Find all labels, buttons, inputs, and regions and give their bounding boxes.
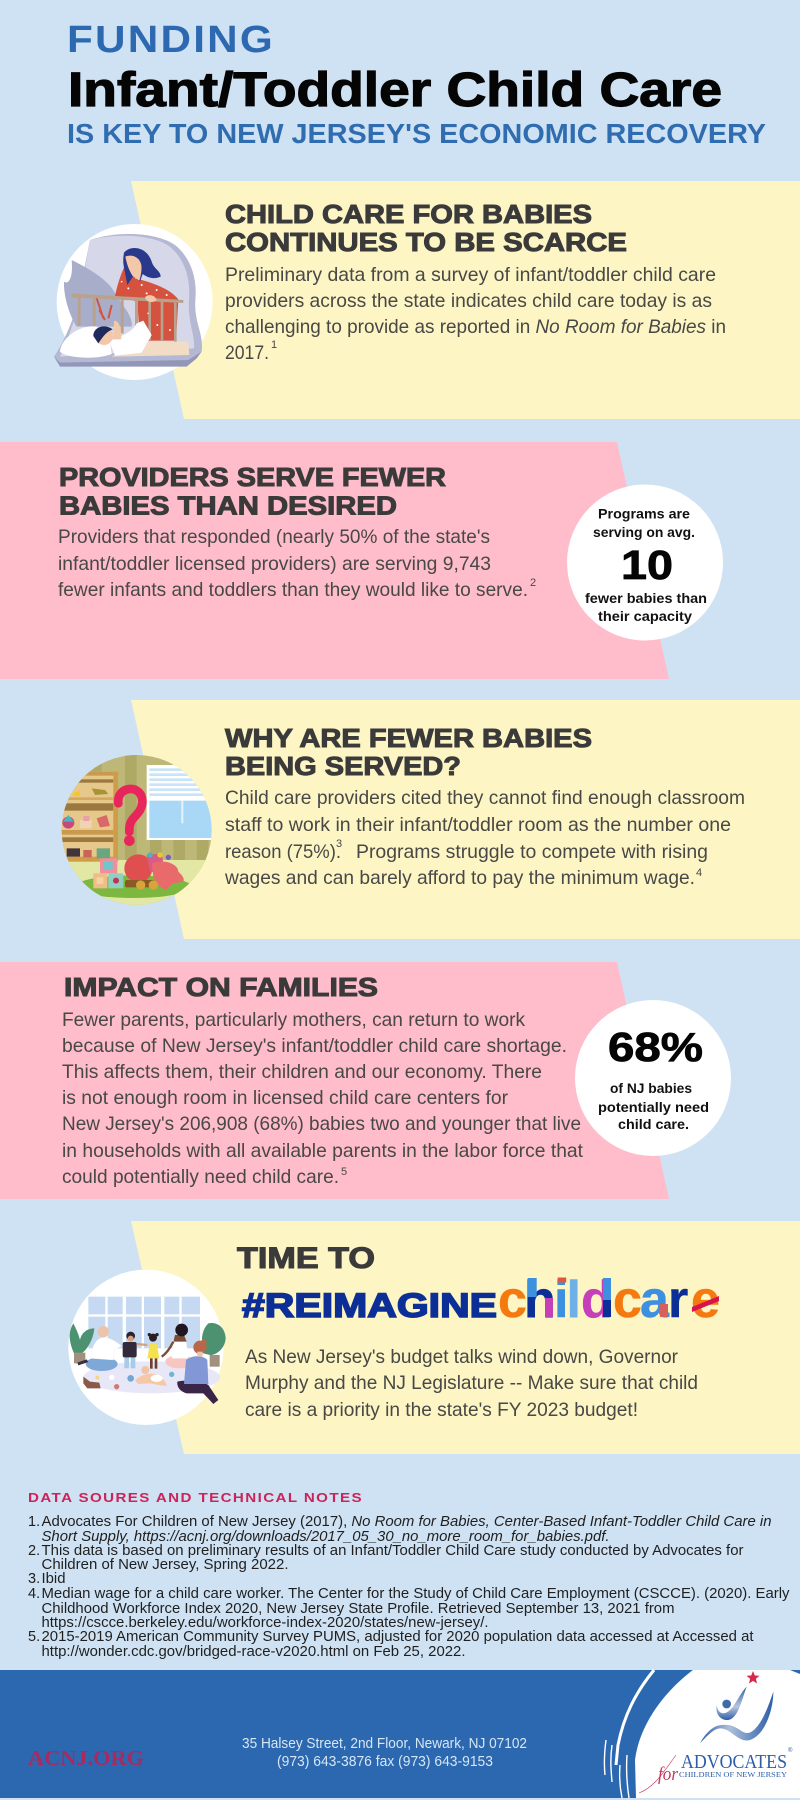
hashtag: reimagine child care: c <box>498 1271 527 1329</box>
body text: This affects them, their children and our economy. There <box>62 1061 542 1083</box>
notes list: Short Supply, https://acnj.org/downloads/2017_05_30_no_more_room_for_babies.pdf. <box>42 1529 610 1545</box>
body text: 5 <box>341 1166 347 1178</box>
address <box>242 1736 527 1770</box>
notes list: 5. <box>28 1629 40 1645</box>
body text: staff to work in their infant/toddler room as the number one <box>225 814 731 836</box>
hashtag: reimagine child care: d <box>581 1271 613 1329</box>
notes list: https://cscce.berkeley.edu/workforce-index-2020/states/new-jersey/. <box>42 1615 489 1631</box>
notes list: 1. <box>28 1514 40 1530</box>
notes list: Childhood Workforce Index 2020, New Jersey State Profile. Retrieved September 13, 2021 from <box>42 1601 674 1617</box>
body text <box>245 1346 698 1421</box>
body text: 4 <box>696 867 702 879</box>
hashtag: reimagine child care: e <box>691 1271 720 1329</box>
body text: As New Jersey's budget talks wind down, Governor <box>245 1346 678 1368</box>
callout: 10 fewer babies: Programs are <box>598 506 690 522</box>
notes list <box>28 1514 790 1660</box>
notes list: 2015-2019 American Community Survey PUMS, adjusted for 2020 population data accessed at Accessed at <box>42 1629 753 1645</box>
callout: 68 percent: potentially need <box>598 1099 709 1115</box>
body text: 1 <box>271 339 277 351</box>
logo: Advocates for Children of New Jersey: for <box>658 1764 679 1785</box>
panel: time to reimagine child care <box>68 1221 800 1454</box>
heading: BABIES THAN DESIRED <box>59 490 397 520</box>
callout: 68 percent: of NJ babies <box>610 1080 692 1096</box>
heading <box>59 462 446 520</box>
callout: 68 percent <box>575 1000 731 1156</box>
callout: 10 fewer babies: serving on avg. <box>593 524 695 540</box>
icon: playroom with question mark <box>60 753 213 907</box>
notes list: Advocates For Children of New Jersey (2017), No Room for Babies, Center-Based Infant-Toddler Child Care in <box>42 1514 772 1530</box>
logo: Advocates for Children of New Jersey <box>604 1670 800 1798</box>
title block: IS KEY TO NEW JERSEY'S ECONOMIC RECOVERY <box>67 118 766 149</box>
heading: BEING SERVED? <box>225 751 461 781</box>
body text: Child care providers cited they cannot find enough classroom <box>225 787 745 809</box>
callout: 10 fewer babies <box>567 484 723 640</box>
body text <box>225 264 726 364</box>
callout: 10 fewer babies: fewer babies than <box>585 590 707 606</box>
body text: reason (75%). <box>225 841 341 863</box>
hashtag: reimagine child care: h <box>524 1271 556 1329</box>
title block <box>67 19 766 149</box>
panel: why are fewer babies being served <box>60 700 800 939</box>
callout: 10 fewer babies: 10 <box>621 542 673 588</box>
address: (973) 643-3876 fax (973) 643-9153 <box>277 1754 493 1770</box>
body text: is not enough room in licensed child care centers for <box>62 1087 508 1109</box>
logo: Advocates for Children of New Jersey: ADVOCATES <box>681 1751 787 1773</box>
address: 35 Halsey Street, 2nd Floor, Newark, NJ 07102 <box>242 1736 527 1752</box>
notes list: 3. <box>28 1571 40 1587</box>
heading: WHY ARE FEWER BABIES <box>225 723 592 753</box>
panel: providers serve fewer babies <box>0 442 723 679</box>
heading: CHILD CARE FOR BABIES <box>225 199 592 229</box>
body text: Murphy and the NJ Legislature -- Make sure that child <box>245 1372 698 1394</box>
notes list: Children of New Jersey, Spring 2022. <box>42 1557 288 1573</box>
logo: Advocates for Children of New Jersey: ® <box>788 1747 793 1754</box>
body text: wages and can barely afford to pay the minimum wage. <box>224 867 695 889</box>
heading: CONTINUES TO BE SCARCE <box>225 227 627 257</box>
logo: Advocates for Children of New Jersey: CHILDREN OF NEW JERSEY <box>679 1770 788 1779</box>
heading: PROVIDERS SERVE FEWER <box>59 462 446 492</box>
body text: could potentially need child care. <box>62 1166 339 1188</box>
notes heading: DATA SOURES AND TECHNICAL NOTES <box>28 1490 363 1505</box>
notes list: This data is based on preliminary results of an Infant/Toddler Child Care study conducted by Advocates for <box>42 1543 744 1559</box>
body text: infant/toddler licensed providers) are serving 9,743 <box>58 553 491 575</box>
body text: Providers that responded (nearly 50% of the state's <box>58 526 490 548</box>
heading: time to: TIME TO <box>237 1242 375 1275</box>
hashtag: reimagine child care: c <box>613 1271 642 1329</box>
hashtag: reimagine child care <box>242 1271 720 1329</box>
technical notes <box>28 1490 790 1660</box>
title block: Infant/Toddler Child Care <box>68 64 722 117</box>
body text <box>62 1009 584 1188</box>
body text: care is a priority in the state's FY 2023 budget! <box>245 1399 638 1421</box>
body text <box>224 787 745 889</box>
notes list: 4. <box>28 1586 40 1602</box>
hashtag: reimagine child care: r <box>668 1271 688 1329</box>
notes list: 2. <box>28 1543 40 1559</box>
icon: families in playroom <box>68 1270 226 1425</box>
body text: 2 <box>530 577 536 589</box>
callout: 10 fewer babies: their capacity <box>598 608 692 624</box>
heading <box>225 723 592 781</box>
panel: child care scarce <box>54 181 800 419</box>
heading: IMPACT ON FAMILIES <box>64 972 378 1002</box>
panel: impact on families <box>0 962 731 1199</box>
hashtag: reimagine child care: #REIMAGINE <box>242 1287 497 1325</box>
body text <box>58 526 536 601</box>
body text: challenging to provide as reported in No Room for Babies in <box>225 316 726 338</box>
footer band <box>0 1670 800 1798</box>
body text: fewer infants and toddlers than they would like to serve. <box>58 579 528 601</box>
body text: providers across the state indicates child care today is as <box>225 290 712 312</box>
heading <box>225 199 627 257</box>
notes list: Ibid <box>42 1571 66 1587</box>
hashtag: reimagine child care: a <box>640 1271 670 1329</box>
body text: because of New Jersey's infant/toddler child care shortage. <box>62 1035 567 1057</box>
callout: 68 percent: 68% <box>608 1024 703 1070</box>
body text: in households with all available parents in the labor force that <box>62 1140 584 1162</box>
notes list: http://wonder.cdc.gov/bridged-race-v2020.html on Feb 25, 2022. <box>42 1644 466 1660</box>
body text: Preliminary data from a survey of infant/toddler child care <box>225 264 716 286</box>
title block: FUNDING <box>67 19 275 61</box>
notes list: Median wage for a child care worker. The Center for the Study of Child Care Employment (CSCCE). (2020). Early <box>42 1586 790 1602</box>
body text: 3 <box>336 838 342 850</box>
hashtag: reimagine child care: i <box>554 1271 568 1329</box>
body text: Programs struggle to compete with rising <box>356 841 708 863</box>
body text: 2017. <box>225 342 269 364</box>
website: ACNJ.ORG <box>28 1746 144 1770</box>
hashtag: reimagine child care: l <box>566 1271 581 1329</box>
body text: New Jersey's 206,908 (68%) babies two and younger that live <box>62 1113 581 1135</box>
icon: mother and baby at crib <box>54 224 213 380</box>
body text: Fewer parents, particularly mothers, can return to work <box>62 1009 525 1031</box>
callout: 68 percent: child care. <box>618 1116 689 1132</box>
